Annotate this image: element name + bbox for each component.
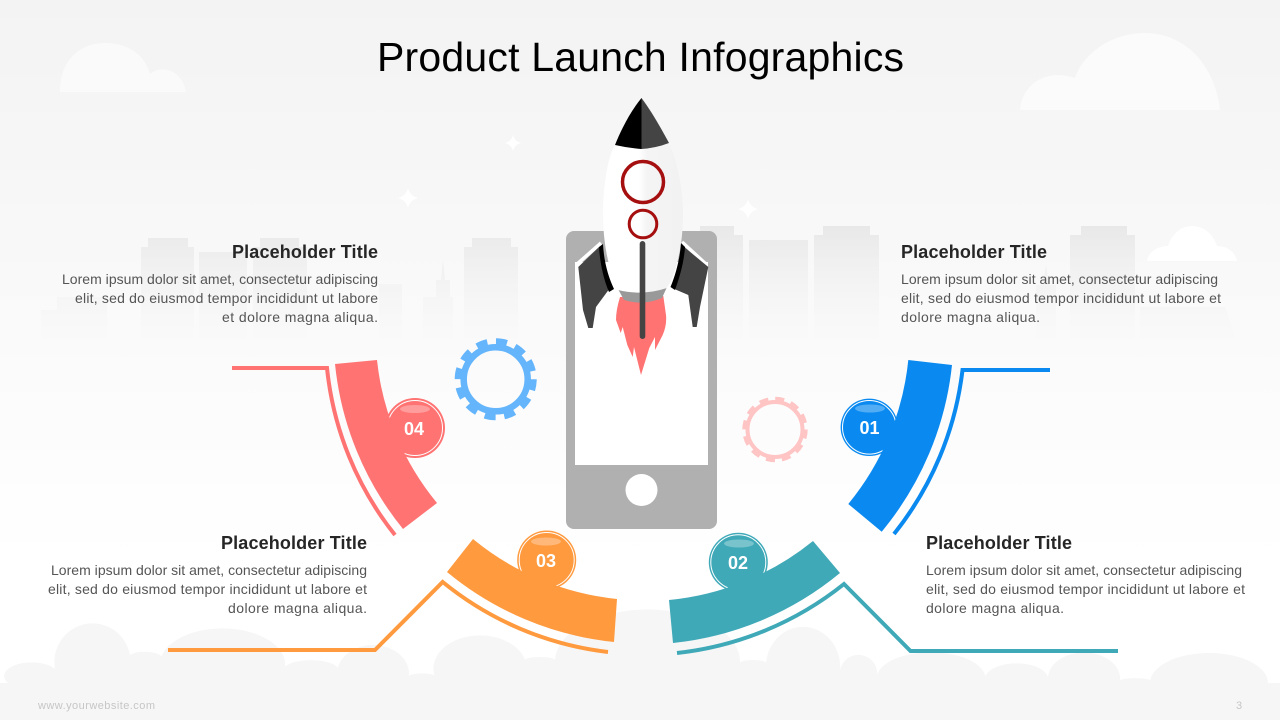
fin bands <box>599 243 685 292</box>
connector 01 <box>894 370 1050 534</box>
phone <box>566 231 717 529</box>
badge 02 <box>709 533 768 592</box>
center stripe <box>640 241 645 339</box>
text block: bottom left: Lorem ipsum dolor sit amet, consectetur adipiscing <box>51 562 367 578</box>
flame <box>616 296 666 375</box>
badge 01: 01 <box>859 418 880 438</box>
badge 04 <box>385 398 445 458</box>
window rings <box>622 162 664 202</box>
text block: top left: et dolore magna aliqua. <box>222 309 378 325</box>
page number: 3 <box>1236 700 1242 712</box>
exhaust band <box>618 287 667 303</box>
left fin <box>578 247 608 328</box>
badge 03: 03 <box>536 551 556 571</box>
text block: top left <box>62 242 378 325</box>
title: Product Launch Infographics <box>377 34 904 80</box>
text block: top right <box>901 242 1221 325</box>
right fin <box>672 246 708 327</box>
badge 01 <box>841 399 898 456</box>
city skyline: left <box>41 238 518 362</box>
sparkle stars <box>398 135 758 219</box>
gear: pink <box>744 399 806 460</box>
nose cone <box>615 98 642 149</box>
badge 02: 02 <box>728 553 748 573</box>
gear: blue <box>458 342 533 417</box>
footer website: www.yourwebsite.com <box>37 700 155 712</box>
badge 04: 04 <box>404 419 424 439</box>
band 03 <box>447 539 617 642</box>
text block: top right: Lorem ipsum dolor sit amet, consectetur adipiscing <box>901 271 1218 287</box>
connector 04 <box>232 368 395 535</box>
text block: bottom right: Lorem ipsum dolor sit amet, consectetur adipiscing <box>926 562 1242 578</box>
connector 02 <box>677 584 1118 653</box>
text block: bottom left: Placeholder Title <box>221 533 367 553</box>
text block: top right: dolore magna aliqua. <box>901 309 1040 325</box>
step 03 orange <box>168 530 617 652</box>
text block: bottom right <box>926 533 1245 616</box>
band 02 <box>669 541 840 643</box>
badge 03 <box>517 530 576 590</box>
text block: bottom left: elit, sed do eiusmod tempor incididunt ut labore et <box>48 581 367 597</box>
text block: bottom right: elit, sed do eiusmod tempor incididunt ut labore et <box>926 581 1245 597</box>
body <box>603 144 683 293</box>
band 01 <box>848 360 952 532</box>
step 02 teal <box>669 533 1118 653</box>
cloud: top right <box>1020 33 1220 110</box>
text block: top left: Placeholder Title <box>232 242 378 262</box>
connector 03 <box>168 582 608 652</box>
city skyline: right <box>700 226 1244 362</box>
rocket <box>576 98 708 375</box>
cloud: small white right <box>1147 226 1237 261</box>
fin highlights <box>576 242 707 265</box>
text block: bottom left: dolore magna aliqua. <box>228 600 367 616</box>
cloud: top left <box>60 43 186 92</box>
text block: bottom right: dolore magna aliqua. <box>926 600 1064 616</box>
text block: top left: Lorem ipsum dolor sit amet, consectetur adipiscing <box>62 271 378 287</box>
text block: bottom right: Placeholder Title <box>926 533 1072 553</box>
band 04 <box>335 360 437 529</box>
text block: top right: Placeholder Title <box>901 242 1047 262</box>
step 04 coral <box>232 360 445 535</box>
text block: top right: elit, sed do eiusmod tempor incididunt ut labore et <box>901 290 1221 306</box>
step 01 blue <box>841 360 1050 534</box>
text block: top left: elit, sed do eiusmod tempor incididunt ut labore <box>75 290 378 306</box>
ground clouds <box>0 609 1280 720</box>
text block: bottom left <box>48 533 367 616</box>
